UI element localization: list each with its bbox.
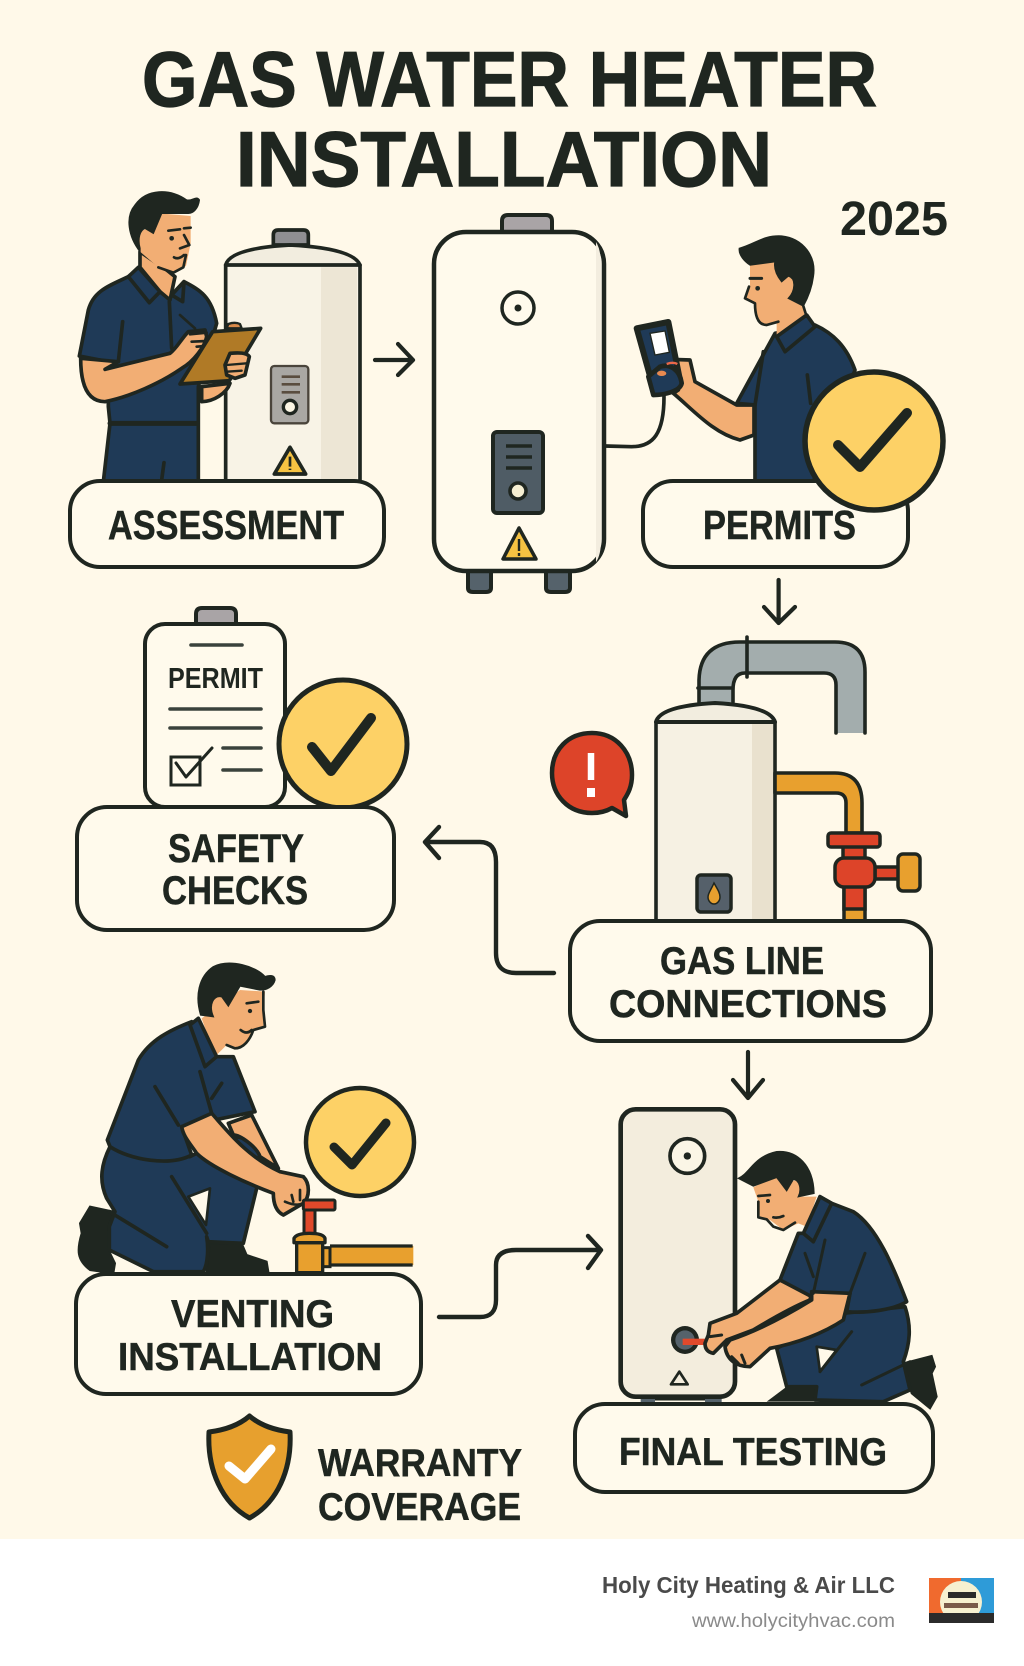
label: gas line connections: GAS LINE	[660, 940, 824, 983]
illustration: gas pipe and valve	[775, 773, 920, 921]
label: assessment: ASSESSMENT	[108, 502, 344, 548]
label: final testing	[575, 1404, 933, 1492]
arrow: gas line to final testing	[733, 1052, 763, 1098]
arrow: venting to final testing	[439, 1236, 601, 1317]
illustration: main water heater	[434, 215, 604, 592]
illustration: final testing technician and tank	[621, 1109, 937, 1408]
check badge: venting	[306, 1088, 414, 1196]
label: safety checks: SAFETY	[168, 827, 304, 871]
arrow: permits to gas line	[764, 580, 795, 623]
illustration: technician with clipboard and tank	[79, 192, 360, 482]
label: venting installation: VENTING	[171, 1293, 334, 1336]
illustration: permit document: PERMIT	[168, 663, 263, 695]
footer company text: www.holycityhvac.com	[691, 1611, 895, 1632]
label: final testing: FINAL TESTING	[619, 1431, 887, 1474]
year: 2025	[840, 193, 948, 246]
arrow: assessment to heater	[375, 344, 413, 375]
title: GAS WATER HEATER	[142, 35, 877, 123]
label: venting installation	[76, 1274, 421, 1394]
label: permits with check badge: PERMITS	[703, 502, 856, 548]
check badge: permit	[279, 680, 407, 808]
illustration: technician with meter	[605, 236, 855, 482]
label: gas line connections	[570, 921, 931, 1041]
illustration: permit document	[145, 608, 285, 807]
illustration: gas line tank	[656, 703, 775, 922]
label: safety checks	[77, 807, 394, 930]
footer company text	[602, 1572, 895, 1632]
warranty text	[318, 1442, 522, 1529]
illustration: kneeling technician at valve	[79, 963, 413, 1273]
label: gas line connections: CONNECTIONS	[609, 983, 887, 1026]
label: assessment	[70, 481, 384, 567]
footer company text: Holy City Heating & Air LLC	[602, 1572, 895, 1598]
icon: warranty shield	[209, 1416, 290, 1518]
logo	[929, 1578, 994, 1623]
warranty text: WARRANTY	[318, 1442, 522, 1485]
illustration: vent pipe	[698, 637, 865, 733]
arrow: gas line to safety checks	[425, 827, 554, 973]
label: safety checks: CHECKS	[162, 869, 308, 913]
illustration: alert bubble	[552, 733, 632, 816]
label: venting installation: INSTALLATION	[118, 1336, 382, 1379]
title	[142, 35, 877, 203]
warranty text: COVERAGE	[318, 1486, 521, 1529]
title: INSTALLATION	[236, 115, 772, 203]
label: permits with check badge	[643, 372, 943, 567]
